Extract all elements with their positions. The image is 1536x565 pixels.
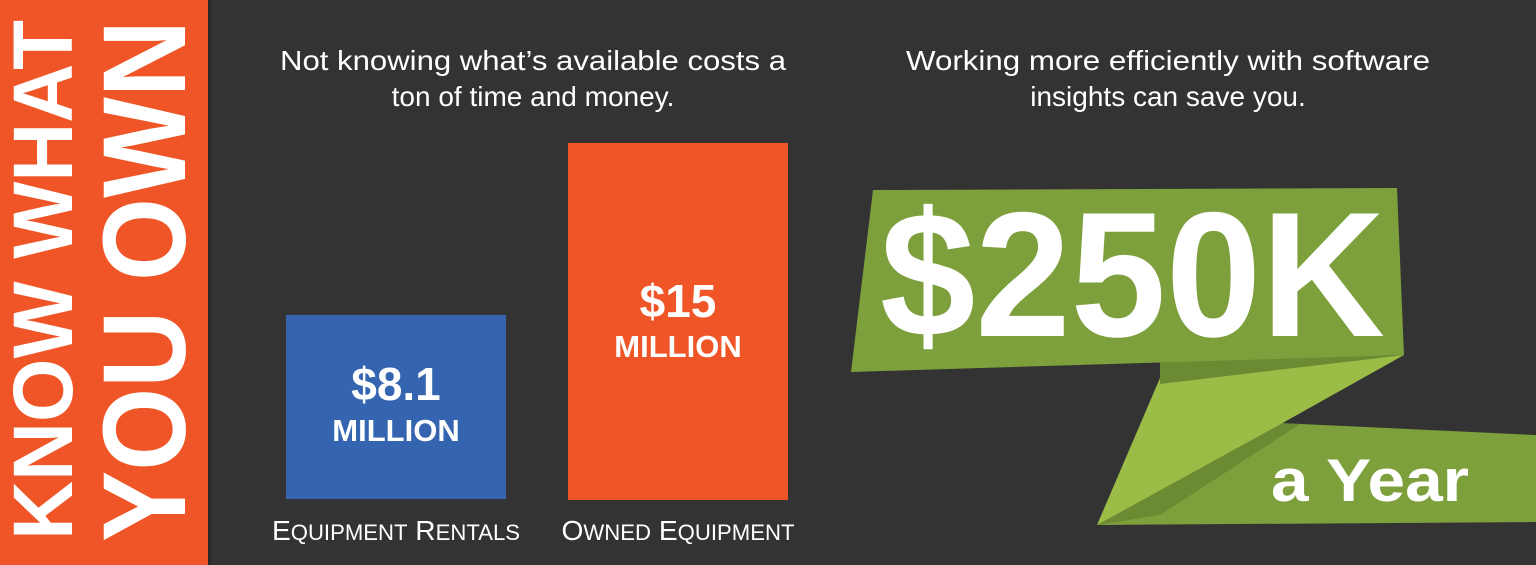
- ribbon: $250K a year: a Year: [1271, 447, 1469, 514]
- bar: owned equipment: MILLION: [614, 329, 742, 364]
- ribbon: $250K a year: $250K: [880, 175, 1385, 374]
- bar: equipment rentals: $8.1: [351, 358, 441, 410]
- bar: equipment rentals: [286, 315, 506, 499]
- heading: savings: [906, 45, 1430, 112]
- bar: equipment rentals: MILLION: [332, 413, 460, 448]
- heading: costs: Not knowing what’s available costs a: [280, 45, 786, 76]
- heading: savings: insights can save you.: [1030, 81, 1306, 112]
- heading: costs: [280, 45, 786, 112]
- bar: owned equipment: [568, 143, 788, 500]
- label: equipment rentals: EQUIPMENT RENTALS: [272, 515, 520, 546]
- ribbon: $250K a year: [851, 175, 1536, 525]
- heading: costs: ton of time and money.: [392, 81, 674, 112]
- bar: owned equipment: $15: [640, 275, 716, 327]
- sidebar: title: [0, 0, 211, 565]
- heading: savings: Working more efficiently with software: [906, 45, 1430, 76]
- label: owned equipment: OWNED EQUIPMENT: [562, 515, 794, 546]
